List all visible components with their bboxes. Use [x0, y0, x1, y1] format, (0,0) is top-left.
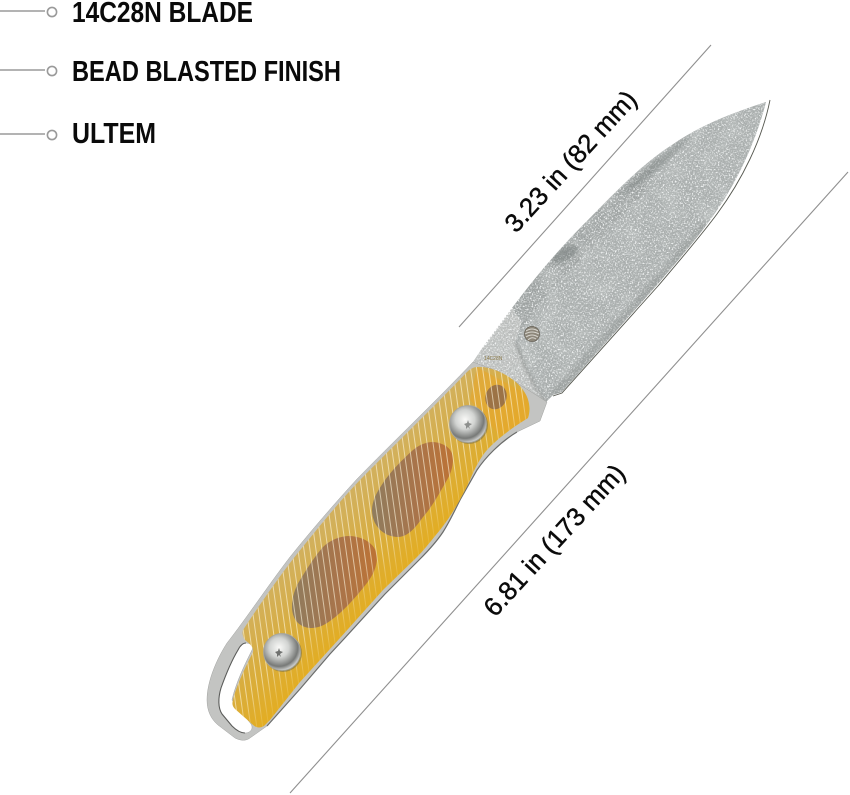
blade: dark stonewash patches: [618, 133, 693, 198]
blade: thumb jimping: [483, 308, 512, 347]
handle: steel tang: [207, 362, 547, 740]
handle: ultem scale: [232, 366, 530, 728]
blade steel stamp: 14C28N: [484, 356, 503, 362]
handle: slot inner shadow: [219, 643, 246, 733]
blade: flat above the grind line: [512, 130, 693, 330]
handle: lower steel shadow line: [267, 432, 517, 726]
handle: rear screw: [450, 406, 488, 444]
handle: small milling window: [485, 384, 507, 410]
blade: ricasso: [473, 308, 547, 402]
handle: [206, 362, 548, 740]
handle: front screw: [264, 634, 302, 672]
handle: upper milling window: [372, 442, 453, 537]
handle: lower milling window: [292, 536, 377, 628]
callout: ultem: ULTEM: [72, 118, 156, 150]
handle: ridges: [234, 367, 530, 727]
icon: blade pivot logo: [524, 326, 540, 342]
knife: [206, 100, 770, 740]
callout: bead blasted finish: [0, 56, 341, 88]
callout: bead blasted finish: BEAD BLASTED FINISH: [72, 56, 341, 88]
dimension: blade length: [459, 45, 711, 327]
dimension: overall length: 6.81 in (173 mm): [477, 458, 631, 622]
callout: ultem: [0, 118, 156, 150]
blade: [460, 95, 775, 410]
callout: 14C28N blade: [0, 0, 253, 29]
handle: amber tint: [470, 367, 528, 428]
dimension: blade length: 3.23 in (82 mm): [498, 84, 643, 238]
blade: cutting edge line: [553, 100, 770, 396]
blade: edge grind shadow: [546, 222, 708, 402]
